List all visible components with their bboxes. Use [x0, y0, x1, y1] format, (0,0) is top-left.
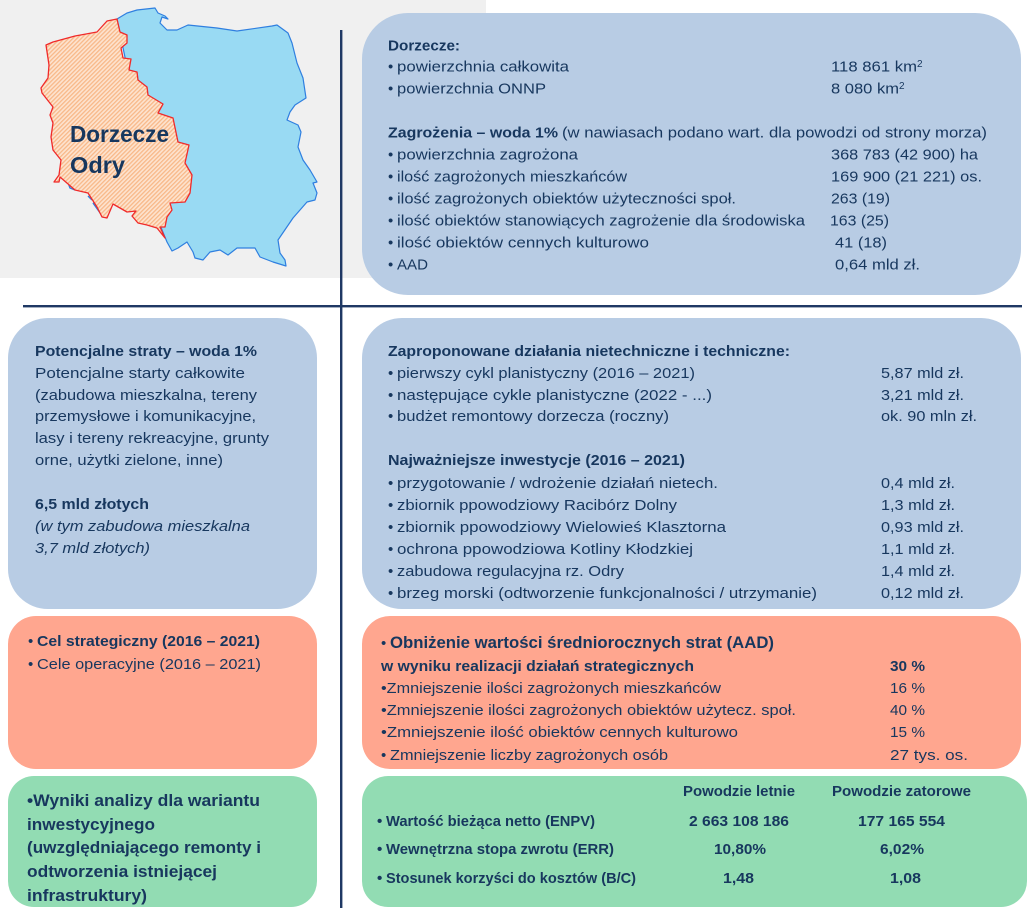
heading: • [381, 635, 386, 652]
threats list: • [388, 212, 393, 230]
panel: strategic objective [8, 616, 317, 769]
row: B/C: 1,08 [890, 870, 921, 887]
column headers: Powodzie letnie [683, 783, 795, 800]
map label: Odry [70, 152, 125, 178]
row: ERR: 10,80% [714, 841, 766, 858]
investments list: zbiornik ppowodziowy Racibórz Dolny [397, 497, 678, 514]
threats list: ilość obiektów cennych kulturowo [397, 234, 649, 252]
threats list [388, 146, 982, 274]
actions list: pierwszy cykl planistyczny (2016 – 2021) [397, 365, 695, 382]
heading text: odtworzenia istniejącej [27, 862, 217, 881]
investments list: • [388, 497, 393, 514]
area list: powierzchnia całkowita [397, 58, 570, 76]
row: ENPV: 177 165 554 [858, 813, 946, 830]
investments list: zbiornik ppowodziowy Wielowieś Klasztorna [397, 519, 727, 536]
row: B/C [377, 870, 921, 887]
row: ERR [377, 841, 924, 858]
reductions list: 15 % [890, 724, 925, 741]
row: ERR: • [377, 841, 382, 858]
threats list: • [388, 168, 393, 186]
heading text: •Wyniki analizy dla wariantu [27, 791, 260, 810]
map: Odra basin [41, 19, 192, 238]
row: ERR: Wewnętrzna stopa zwrotu (ERR) [386, 841, 614, 858]
row: ENPV: • [377, 813, 382, 830]
actions list: • [388, 387, 393, 404]
strategic goal: • [28, 633, 33, 650]
heading: Obniżenie wartości średniorocznych strat (AAD) [390, 633, 774, 652]
row: ENPV: Wartość bieżąca netto (ENPV) [386, 813, 595, 830]
investments list: zabudowa regulacyjna rz. Odry [397, 563, 625, 580]
area list: 8 080 km [831, 80, 899, 98]
heading: threats: (w nawiasach podano wart. dla powodzi od strony morza) [562, 124, 987, 142]
row: ENPV [377, 813, 946, 830]
actions list: • [388, 408, 393, 425]
area list: powierzchnia ONNP [397, 80, 546, 98]
investments list: • [388, 563, 393, 580]
panel: proposed actions [362, 318, 1021, 609]
investments list: 1,3 mld zł. [881, 497, 955, 514]
investments list: • [388, 585, 393, 602]
investments list: brzeg morski (odtworzenie funkcjonalności / utrzymanie) [397, 585, 817, 602]
threats list: 263 (19) [831, 190, 890, 208]
reductions list: •Zmniejszenie ilość obiektów cennych kulturowo [381, 724, 738, 741]
actions list: 3,21 mld zł. [881, 387, 964, 404]
heading: Zaproponowane działania nietechniczne i techniczne: [388, 343, 790, 360]
area list: • [388, 80, 393, 98]
actions list: • [388, 365, 393, 382]
area list: 118 861 km [831, 58, 917, 76]
map: Odra river basin in Poland [41, 8, 317, 266]
row: B/C: Stosunek korzyści do kosztów (B/C) [386, 870, 636, 887]
reductions list: 16 % [890, 680, 925, 697]
note: (w tym zabudowa mieszkalna [35, 518, 250, 535]
threats list: ilość zagrożonych mieszkańców [397, 168, 627, 186]
heading text: (uwzględniającego remonty i [27, 838, 261, 857]
threats list: • [388, 256, 393, 274]
description: (zabudowa mieszkalna, tereny [35, 387, 258, 404]
row: B/C: 1,48 [723, 870, 754, 887]
description: przemysłowe i komunikacyjne, [35, 408, 256, 425]
investments list: • [388, 541, 393, 558]
reductions list [381, 680, 968, 764]
description [35, 365, 270, 469]
heading: investments: Najważniejsze inwestycje (2016 – 2021) [388, 452, 685, 469]
heading [380, 633, 925, 675]
investments list: • [388, 475, 393, 492]
reductions list: •Zmniejszenie ilości zagrożonych obiektów użytecz. społ. [381, 702, 796, 719]
heading text: infrastruktury) [27, 886, 147, 905]
threats list: 0,64 mld zł. [835, 256, 920, 274]
total value: 6,5 mld złotych [35, 496, 149, 513]
investments list: 0,4 mld zł. [881, 475, 955, 492]
map: blue border fragments in the south-west [67, 180, 103, 217]
threats list: • [388, 190, 393, 208]
column headers [683, 783, 971, 800]
investments list: przygotowanie / wdrożenie działań nietech. [397, 475, 718, 492]
strategic goal: Cel strategiczny (2016 – 2021) [37, 633, 260, 650]
threats list: 169 900 (21 221) os. [831, 168, 982, 186]
map label: Dorzecze [70, 121, 169, 147]
panel: potential losses [8, 318, 317, 609]
investments list [388, 475, 964, 602]
reductions list: 40 % [890, 702, 925, 719]
investments list: 0,12 mld zł. [881, 585, 964, 602]
reductions list: •Zmniejszenie ilości zagrożonych mieszkańców [381, 680, 721, 697]
threats list: AAD [397, 256, 428, 274]
threats list: ilość obiektów stanowiących zagrożenie dla środowiska [397, 212, 806, 230]
operational goals: Cele operacyjne (2016 – 2021) [37, 656, 261, 673]
map background [0, 0, 486, 278]
area list: 2 [899, 81, 905, 92]
area list: • [388, 58, 393, 76]
panel: basin data and threats [362, 13, 1021, 295]
heading: threats [388, 124, 987, 142]
investments list: • [388, 519, 393, 536]
area list: 2 [917, 59, 923, 70]
actions list: 5,87 mld zł. [881, 365, 964, 382]
actions list: ok. 90 mln zł. [881, 408, 977, 425]
operational goals: • [28, 656, 33, 673]
panel: economic indicators table [362, 776, 1027, 907]
threats list: ilość zagrożonych obiektów użyteczności społ. [397, 190, 736, 208]
panel: AAD reduction [362, 616, 1021, 769]
map: rest of Poland [117, 8, 317, 266]
area list [388, 58, 923, 98]
investments list: ochrona ppowodziowa Kotliny Kłodzkiej [397, 541, 693, 558]
threats list: 41 (18) [835, 234, 887, 252]
heading: 30 % [890, 658, 925, 675]
threats list: 163 (25) [830, 212, 889, 230]
column headers: Powodzie zatorowe [832, 783, 971, 800]
heading text: inwestycyjnego [27, 815, 155, 834]
note [35, 518, 250, 557]
investments list: 1,4 mld zł. [881, 563, 955, 580]
threats list: • [388, 146, 393, 164]
actions list: następujące cykle planistyczne (2022 - ...) [397, 387, 712, 404]
note: 3,7 mld złotych) [35, 540, 150, 557]
row: ERR: 6,02% [880, 841, 924, 858]
threats list: 368 783 (42 900) ha [831, 146, 979, 164]
reductions list: 27 tys. os. [890, 747, 968, 764]
heading: w wyniku realizacji działań strategicznych [380, 658, 694, 675]
description: orne, użytki zielone, inne) [35, 452, 223, 469]
heading: threats: Zagrożenia – woda 1% [388, 124, 558, 142]
actions list [388, 365, 977, 425]
heading: Potencjalne straty – woda 1% [35, 343, 257, 360]
row: ENPV: 2 663 108 186 [689, 813, 789, 830]
description: Potencjalne starty całkowite [35, 365, 245, 382]
heading text [27, 791, 261, 905]
horizontal divider [23, 305, 1022, 307]
investments list: 0,93 mld zł. [881, 519, 964, 536]
panel: analysis result title [8, 776, 317, 907]
reductions list: • [381, 747, 386, 764]
investments list: 1,1 mld zł. [881, 541, 955, 558]
vertical divider [340, 30, 342, 908]
heading: Dorzecze: [388, 38, 460, 54]
row: B/C: • [377, 870, 382, 887]
description: lasy i tereny rekreacyjne, grunty [35, 430, 270, 447]
threats list: powierzchnia zagrożona [397, 146, 579, 164]
threats list: • [388, 234, 393, 252]
reductions list: Zmniejszenie liczby zagrożonych osób [390, 747, 668, 764]
actions list: budżet remontowy dorzecza (roczny) [397, 408, 669, 425]
